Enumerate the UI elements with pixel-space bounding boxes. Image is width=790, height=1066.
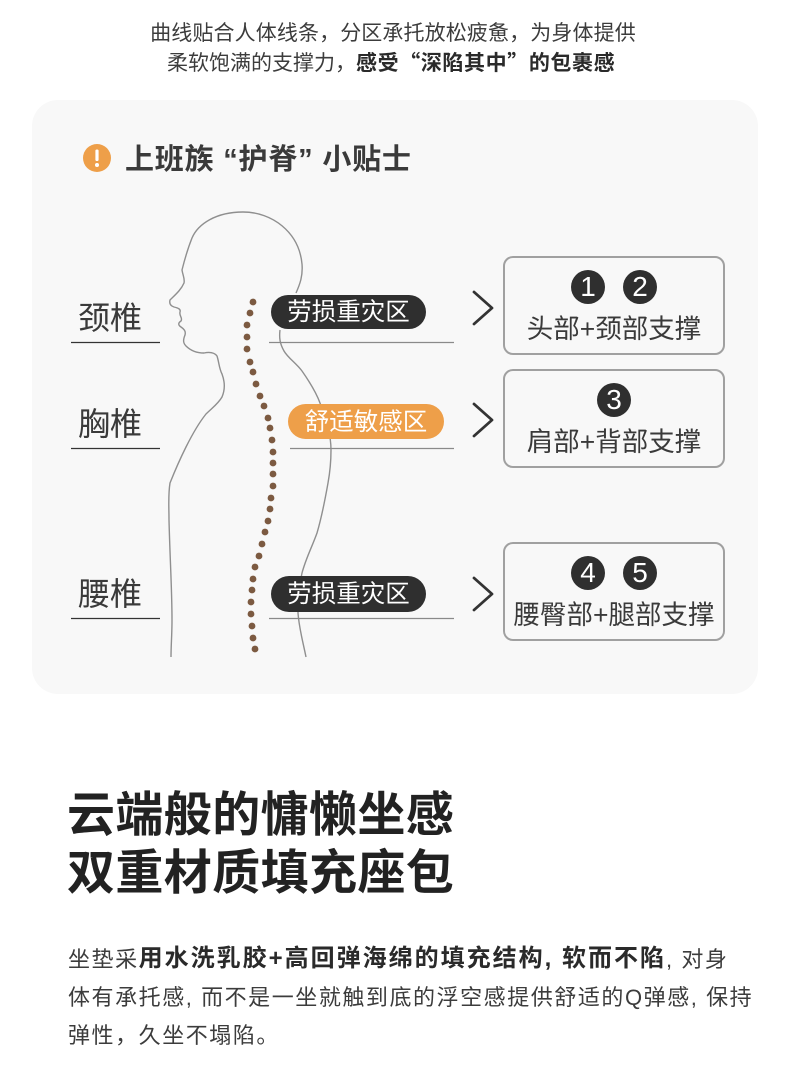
pill: strain zone waist xyxy=(271,576,426,612)
intro text: 曲线贴合人体线条，分区承托放松疲惫，为身体提供 xyxy=(150,22,636,45)
box: head and neck support xyxy=(503,256,725,355)
box: waist and leg support xyxy=(503,542,725,641)
body text: 体有承托感, 而不是一坐就触到底的浮空感提供舒适的Q弹感, 保持 xyxy=(68,985,753,1010)
number 5 xyxy=(623,556,657,590)
main heading xyxy=(67,789,454,900)
intro text: 柔软饱满的支撑力，感受“深陷其中”的包裹感 xyxy=(167,47,615,77)
label: thoracic spine: 胸椎 xyxy=(78,406,142,442)
main heading: 云端般的慵懒坐感 xyxy=(67,789,454,842)
caption: waist and leg: 腰臀部+腿部支撑 xyxy=(514,600,714,630)
box: shoulder and back support xyxy=(503,369,725,468)
caption: shoulder and back: 肩部+背部支撑 xyxy=(527,427,701,457)
pill: strain zone neck xyxy=(271,295,426,329)
number 5: 5 xyxy=(632,557,648,588)
number 2 xyxy=(623,270,657,304)
body text: 坐垫采用水洗乳胶+高回弹海绵的填充结构, 软而不陷, 对身 xyxy=(68,945,728,972)
arrows xyxy=(474,292,492,610)
spine dots xyxy=(244,299,276,652)
body outline xyxy=(169,212,331,657)
number 3 xyxy=(597,383,631,417)
body text: 弹性，久坐不塌陷。 xyxy=(68,1023,280,1048)
number 2: 2 xyxy=(632,271,648,302)
pill: sensitive zone: 舒适敏感区 xyxy=(305,409,427,436)
pill: strain zone neck: 劳损重灾区 xyxy=(287,299,410,326)
body text xyxy=(68,945,753,1048)
number 1: 1 xyxy=(580,271,596,302)
number 4: 4 xyxy=(580,557,596,588)
number 3: 3 xyxy=(606,384,622,415)
main heading: 双重材质填充座包 xyxy=(67,847,454,900)
caption: head and neck: 头部+颈部支撑 xyxy=(527,314,701,344)
pill: sensitive zone xyxy=(288,404,444,439)
icon: exclamation mark xyxy=(83,144,111,172)
number 1 xyxy=(571,270,605,304)
heading: tips: 上班族 “护脊” 小贴士 xyxy=(125,144,412,176)
number 4 xyxy=(571,556,605,590)
intro text xyxy=(150,22,636,77)
pill: strain zone waist: 劳损重灾区 xyxy=(287,581,410,608)
label: cervical spine: 颈椎 xyxy=(78,300,142,336)
label: lumbar spine: 腰椎 xyxy=(78,576,142,612)
panel: spine tips xyxy=(32,100,758,694)
